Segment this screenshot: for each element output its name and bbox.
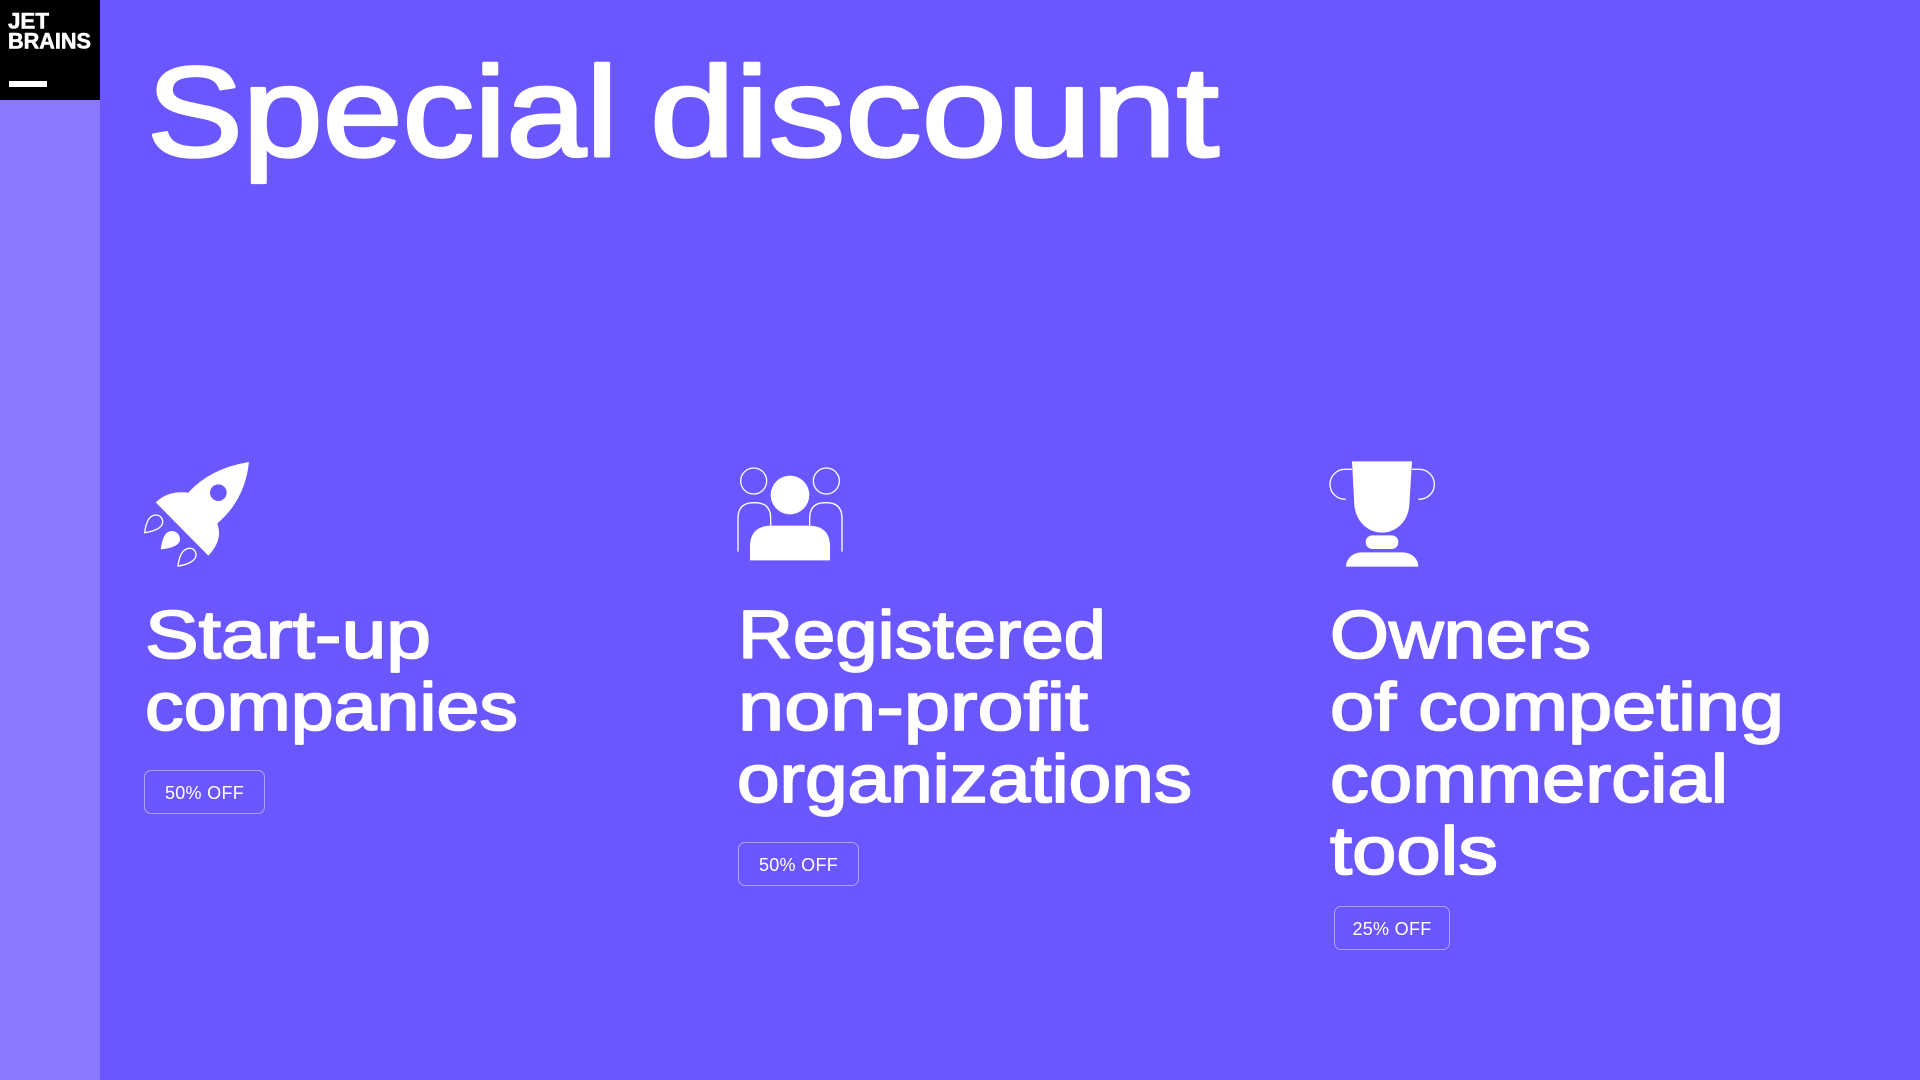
- title: [147, 41, 1220, 184]
- heading: registered non-profit organizations: organizations: [737, 741, 1192, 817]
- icon: people: [737, 467, 843, 560]
- heading: start-up companies: [145, 597, 518, 745]
- badge: 25% off: [1334, 906, 1450, 950]
- logo: JetBrains: JET: [8, 8, 50, 34]
- column: owners of competing commercial tools: [1329, 461, 1784, 950]
- heading: start-up companies: companies: [145, 669, 518, 745]
- heading: registered non-profit organizations: non-profit: [738, 669, 1088, 745]
- heading: start-up companies: Start-up: [145, 597, 431, 673]
- heading: owners of competing commercial tools: [1330, 597, 1784, 889]
- heading: registered non-profit organizations: Registered: [738, 597, 1106, 673]
- title: discount: [650, 41, 1219, 184]
- heading: owners of competing commercial tools: of competing: [1330, 669, 1784, 745]
- badge: 50% off: [144, 770, 265, 814]
- badge: 25% off: 25% OFF: [1352, 918, 1432, 938]
- icon: rocket: [144, 462, 249, 567]
- badge: 50% off: 50% OFF: [759, 854, 838, 874]
- column: registered non-profit organizations: [737, 467, 1192, 886]
- heading: owners of competing commercial tools: Owners: [1330, 597, 1591, 673]
- column: start-up companies: [144, 462, 518, 814]
- heading: registered non-profit organizations: [737, 597, 1192, 817]
- icon: trophy: [1329, 461, 1435, 567]
- title: Special: [147, 41, 618, 184]
- badge: 50% off: [738, 842, 859, 886]
- logo: JetBrains: [0, 0, 100, 100]
- badge: 50% off: 50% OFF: [165, 782, 244, 802]
- heading: owners of competing commercial tools: commercial: [1330, 741, 1728, 817]
- sidebar strip: [0, 0, 100, 1080]
- logo: JetBrains: BRAINS: [8, 28, 91, 54]
- heading: owners of competing commercial tools: tools: [1330, 813, 1498, 889]
